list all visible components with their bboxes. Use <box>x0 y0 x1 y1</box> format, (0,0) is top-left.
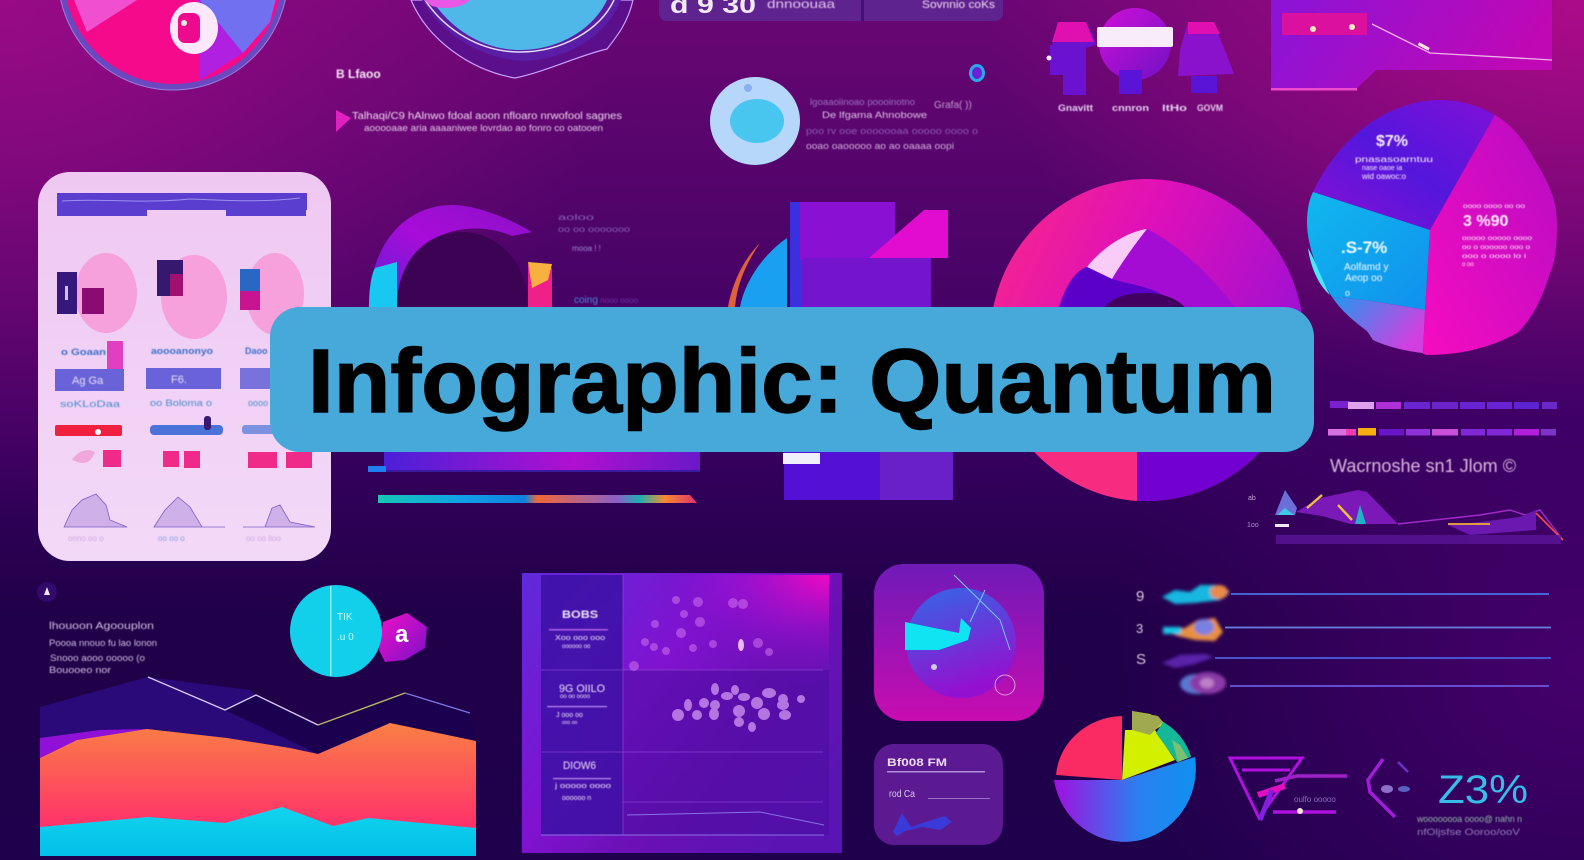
icon: small droplet <box>969 64 985 82</box>
pie chart: top left cropped <box>58 0 288 90</box>
row labels: S <box>1136 651 1146 668</box>
icon: light blue orb with text: Grafa( )) <box>934 100 972 111</box>
segment label: right: oo o oooooo ooo o <box>1462 245 1531 251</box>
icon: cyan circle with hexagon: TIK <box>337 612 353 623</box>
row labels: oooooo n <box>562 795 591 802</box>
icon: cyan circle with hexagon <box>290 585 427 677</box>
labels row two <box>60 398 268 409</box>
spark chart <box>1247 490 1563 544</box>
row labels: 9 <box>1136 588 1144 605</box>
blobs <box>1162 585 1230 694</box>
icon: ring marker <box>170 2 218 54</box>
segmented bars with caption <box>1247 401 1563 544</box>
panel: purple table chart <box>522 573 842 853</box>
chart labels <box>1058 103 1223 113</box>
slider bars <box>55 416 282 436</box>
axis labels: oo oo lloo <box>246 534 281 543</box>
row labels: DIOW6 <box>563 760 596 772</box>
text block: top centre-left: Talhaqi/C9 hAlnwo fdoal aoon nfloaro nrwofool sagnes <box>352 111 622 122</box>
text block: top centre-left <box>336 67 622 133</box>
pie chart: right with three segments <box>1307 100 1557 355</box>
spark chart: 1oo <box>1247 522 1259 529</box>
segment label: top: nase oaoe ia <box>1362 165 1402 172</box>
labels row two: soKLoDaa <box>60 399 120 409</box>
widget: top bars and dome <box>1046 8 1234 113</box>
chart labels: Gnavitt <box>1058 103 1093 113</box>
segment label: right <box>1462 204 1533 268</box>
buttons: Ag Ga <box>72 375 104 387</box>
arch labels: coing nooo oooo <box>574 295 638 306</box>
labels row two: oo Boloma o <box>150 398 212 408</box>
arch chart <box>368 205 700 503</box>
chart labels: ltHo <box>1162 103 1188 113</box>
pie chart: bottom <box>1054 711 1196 842</box>
row labels: ooo oo <box>562 720 578 726</box>
buttons <box>55 368 280 391</box>
text block: top centre-left: B Lfaoo <box>336 67 381 81</box>
text block: bottom left <box>49 621 157 675</box>
area chart: bottom left <box>40 677 476 856</box>
axis labels <box>68 534 281 543</box>
segment label: left <box>1341 238 1388 298</box>
text block: bottom left: Poooa nnouo fu lao lonon <box>49 638 157 648</box>
title banner <box>270 307 1314 452</box>
icon card: radial orb <box>874 564 1044 721</box>
figure: Z3% <box>1438 768 1528 812</box>
ranked lines with blobs <box>1136 585 1551 694</box>
segment label: top: $7% <box>1376 133 1408 150</box>
icon: magenta triangle <box>336 110 351 132</box>
row labels: 9G OIILO <box>559 683 605 695</box>
colour strip <box>378 495 697 503</box>
scatter dots <box>629 596 773 671</box>
swatches <box>57 260 260 314</box>
segment label: right: oooo oooo oo oo <box>1463 204 1526 210</box>
bubble: top cyan disc <box>411 0 633 78</box>
row labels <box>547 609 611 802</box>
box chart: centre <box>728 202 953 500</box>
caption: Wacrnoshe sn1 Jlom © <box>1330 456 1516 476</box>
icon: cyan circle with hexagon: a <box>395 621 409 648</box>
text block: bottom left: Snooo aooo ooooo (o <box>50 653 145 663</box>
inner shapes <box>1056 229 1244 320</box>
segment label: left: .S-7% <box>1341 238 1387 257</box>
arch labels <box>558 213 638 306</box>
stat bar: top <box>659 0 1003 21</box>
segment label: left: o <box>1345 288 1350 298</box>
segment label: right: ooooo ooooo oooo <box>1462 236 1533 242</box>
row labels <box>1136 588 1146 668</box>
title banner: Infographic: Quantum <box>308 332 1276 432</box>
glyph row: funnel and figure: woooooooa oooo@ nahn n <box>1416 814 1522 824</box>
segment label: right: 3 %90 <box>1463 213 1508 230</box>
icon: funnel <box>1230 758 1347 820</box>
arch labels: aoloo <box>558 213 595 222</box>
icon: light blue orb with text: lgoaaoiinoao poooinotno <box>810 97 915 107</box>
arch labels: oo oo ooooooo <box>558 225 631 234</box>
row labels: J ooo oo <box>556 712 583 719</box>
labels row one <box>61 346 268 357</box>
pink tags <box>103 450 312 468</box>
row labels: oo oo oooo <box>560 694 591 700</box>
buttons: F6. <box>171 374 187 386</box>
axis labels: onno oo o <box>68 534 104 543</box>
text block: bottom left: lhouoon Agoouplon <box>49 621 154 632</box>
icon: light blue orb with text: De lfgama Ahnobowe <box>822 110 927 120</box>
arch labels: mooa ! ! <box>572 244 601 253</box>
row labels: BOBS <box>562 609 598 621</box>
row labels: 3 <box>1136 621 1143 636</box>
row labels: oooooo oo <box>562 644 591 650</box>
icon: light blue orb with text <box>710 77 978 165</box>
bar row one <box>1330 401 1557 409</box>
row labels: j ooooo oooo <box>554 783 611 790</box>
segment label: top: wid oawoc:o <box>1361 172 1407 181</box>
icon: cyan circle with hexagon: .u 0 <box>337 632 354 643</box>
small card: text and sketch: rod Ca <box>889 789 915 800</box>
chart labels: GOVM <box>1197 103 1223 113</box>
labels row two: oooo <box>248 398 268 408</box>
labels row one: o Goaan <box>61 347 106 357</box>
shelf below title <box>384 448 700 471</box>
bar row two <box>1328 428 1556 436</box>
glyph row: funnel and figure: nfOljsfse Ooroo/ooV <box>1417 827 1520 837</box>
chart: top right gradient panel <box>1271 0 1552 90</box>
labels row one: aoooanonyo <box>151 346 214 356</box>
segment label: right: ooo o oooo lo i <box>1462 254 1526 260</box>
small card: text and sketch <box>874 744 1003 845</box>
segment label: top: pnasasoarntuu <box>1355 155 1433 164</box>
panel: light dashboard <box>38 172 331 561</box>
donut chart: centre right <box>990 179 1304 501</box>
segment label: left: Aolfamd y <box>1344 262 1388 273</box>
blob charts <box>75 253 304 339</box>
icon: light blue orb with text: ooao oaooooo ao ao oaaaa oopi <box>806 141 954 151</box>
chart labels: cnnron <box>1112 103 1149 113</box>
axis labels: oo oo o <box>158 534 185 543</box>
icon: light blue orb with text: poo rv ooe ooooooaa ooooo oooo o <box>806 126 978 136</box>
segment label: left: Aeop oo <box>1345 273 1383 284</box>
row labels: Xoo ooo ooo <box>555 635 605 642</box>
icon: small pin <box>37 582 57 602</box>
labels row one: Daoo <box>245 346 268 356</box>
header band <box>57 193 307 216</box>
text block: bottom left: Bouooeo nor <box>49 665 111 675</box>
text block: top centre-left: aooooaae aria aaaaniwee lovrdao ao fonro co oatooen <box>364 123 603 133</box>
icon: arc <box>1368 759 1395 817</box>
mini area charts <box>64 494 315 527</box>
segment label: top <box>1355 133 1433 181</box>
small card: text and sketch: Bf008 FM <box>887 757 947 769</box>
spark chart: ab <box>1248 495 1256 502</box>
lines <box>1215 594 1551 686</box>
segment label: right: o oo <box>1462 262 1474 268</box>
glyph row: funnel and figure: oulfo ooooo <box>1294 795 1336 804</box>
glyph row: funnel and figure <box>1230 758 1528 837</box>
